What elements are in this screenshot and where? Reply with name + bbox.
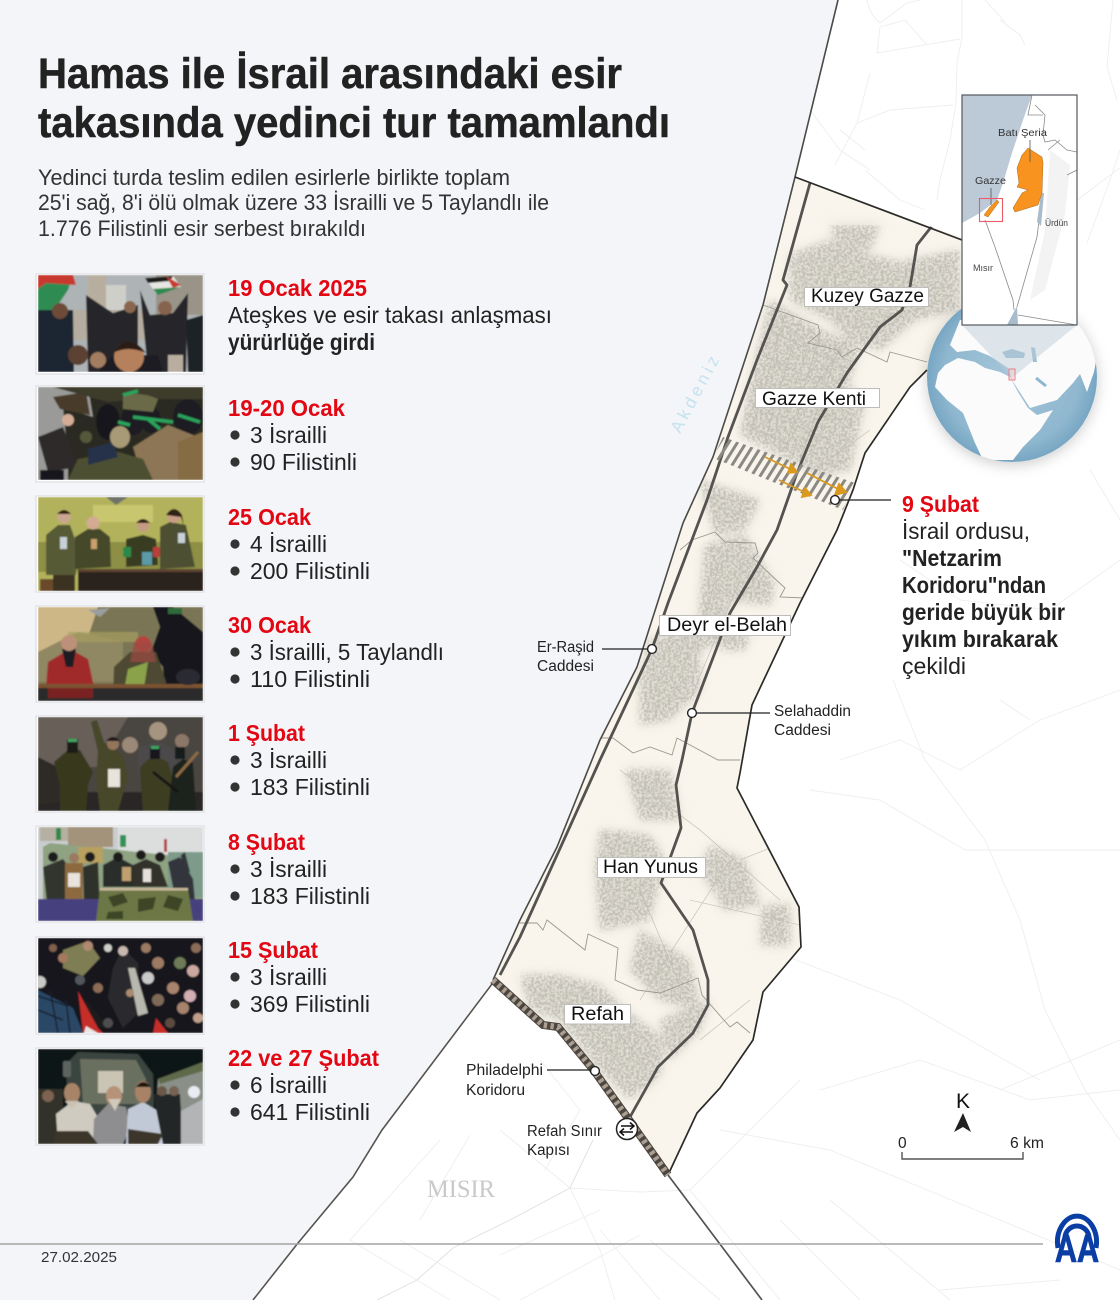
timeline: 22 ve 27 Şubat: 6 İsrailli bbox=[250, 1072, 327, 1098]
country label: Mısır: MISIR bbox=[427, 1176, 495, 1203]
timeline: 22 ve 27 Şubat: 22 ve 27 Şubat bbox=[228, 1045, 379, 1071]
label: Gazze Kenti: Gazze Kenti bbox=[762, 389, 866, 410]
timeline: 15 Şubat bbox=[228, 937, 370, 1017]
sea label: Akdeniz: Akdeniz bbox=[667, 353, 723, 436]
arrows: Israeli withdrawal from Netzarim bbox=[765, 457, 846, 497]
scale bar bbox=[898, 1135, 1044, 1159]
inset: Gaza bbox=[984, 200, 999, 217]
timeline: 19-20 Ocak bbox=[228, 395, 357, 475]
title bbox=[38, 50, 670, 147]
subtitle: 1.776 Filistinli esir serbest bırakıldı bbox=[38, 216, 366, 241]
timeline: 22 ve 27 Şubat: 641 Filistinli bbox=[250, 1099, 370, 1125]
callout: Netzarim 9 Şubat: İsrail ordusu, bbox=[902, 518, 1030, 544]
inset: West Bank bbox=[1013, 148, 1043, 212]
callout: Refah Sınır Kapısı bbox=[527, 1118, 638, 1159]
photo: Red Cross handover table bbox=[38, 607, 203, 701]
inset label: Mısır: Mısır bbox=[973, 263, 993, 273]
timeline: 8 Şubat bbox=[228, 829, 370, 909]
scale bar: 6 km bbox=[1010, 1135, 1044, 1152]
timeline: 30 Ocak: 3 İsrailli, 5 Taylandlı bbox=[250, 639, 444, 665]
callout: Er-Raşid Caddesi bbox=[537, 639, 656, 675]
Netzarim corridor hatch band bbox=[716, 437, 854, 510]
surrounding faint road network bbox=[350, 0, 1120, 1300]
callout: Philadelphi Koridoru bbox=[466, 1062, 599, 1099]
timeline: 25 Ocak: 200 Filistinli bbox=[250, 558, 370, 584]
photo frames bbox=[36, 274, 204, 1145]
roads: Er-Rashid and Salah al-Din bbox=[500, 183, 932, 1117]
inset locator map bbox=[962, 95, 1077, 325]
photo: ceasefire celebration with flags bbox=[38, 275, 203, 372]
callout: Er-Raşid Caddesi: Er-Raşid bbox=[537, 639, 594, 656]
timeline: 19-20 Ocak: 90 Filistinli bbox=[250, 449, 357, 475]
inset label: Batı Şeria: Batı Şeria bbox=[998, 127, 1047, 139]
inset label: Ürdün: Ürdün bbox=[1045, 218, 1068, 229]
timeline: 22 ve 27 Şubat bbox=[228, 1045, 379, 1125]
timeline: 15 Şubat: 369 Filistinli bbox=[250, 991, 370, 1017]
streets: Gaza City grid bbox=[560, 315, 870, 1060]
inset: leader lines bbox=[991, 140, 1030, 205]
inset: borders bbox=[985, 95, 1077, 325]
timeline: 19 Ocak 2025: Ateşkes ve esir takası anlaşması bbox=[228, 302, 552, 328]
timeline: 30 Ocak: 30 Ocak bbox=[228, 612, 311, 638]
map: Gaza Strip territory bbox=[253, 0, 1000, 1300]
inset: Mediterranean sea bbox=[962, 95, 1032, 223]
callout: Netzarim 9 Şubat bbox=[831, 491, 1065, 679]
inset label: Gazze: Gazze bbox=[975, 175, 1006, 187]
callout: Netzarim 9 Şubat: "Netzarim bbox=[902, 545, 1002, 571]
label: Kuzey Gazze: Kuzey Gazze bbox=[811, 286, 924, 307]
logo: Anadolu Agency bbox=[1055, 1216, 1099, 1271]
timeline: 8 Şubat: 3 İsrailli bbox=[250, 856, 327, 882]
inset: Dead Sea and Red Sea bbox=[1007, 193, 1044, 325]
callout: Netzarim 9 Şubat: geride büyük bir bbox=[902, 599, 1065, 625]
timeline: 8 Şubat: 183 Filistinli bbox=[250, 883, 370, 909]
subtitle: 25'i sağ, 8'i ölü olmak üzere 33 İsrailli ve 5 Taylandlı ile bbox=[38, 190, 549, 215]
photo: captive handover among fighters bbox=[38, 387, 203, 480]
callout: Refah Sınır Kapısı: Kapısı bbox=[527, 1142, 570, 1159]
subtitle bbox=[38, 165, 549, 241]
timeline: 19-20 Ocak: 3 İsrailli bbox=[250, 422, 327, 448]
timeline: 30 Ocak bbox=[228, 612, 444, 692]
scale bar: 0 bbox=[898, 1135, 907, 1152]
locator globe bbox=[927, 292, 1100, 462]
inset: Gaza selection box bbox=[980, 198, 1002, 222]
callout: Selahaddin Caddesi: Selahaddin bbox=[774, 703, 851, 720]
timeline: 1 Şubat: 3 İsrailli bbox=[250, 747, 327, 773]
label: Han Yunus: Han Yunus bbox=[603, 857, 698, 878]
photo: captive with fighters in front of posters bbox=[38, 717, 203, 811]
timeline: 1 Şubat: 183 Filistinli bbox=[250, 774, 370, 800]
panel: sea and left column background bbox=[0, 0, 838, 1300]
timeline: 25 Ocak: 4 İsrailli bbox=[250, 531, 327, 557]
timeline: 1 Şubat: 1 Şubat bbox=[228, 720, 305, 746]
label: Deyr el-Belah: Deyr el-Belah bbox=[667, 615, 787, 636]
north arrow bbox=[954, 1090, 971, 1132]
photo: crowd with Palestinian flag bbox=[38, 938, 203, 1033]
subtitle: Yedinci turda teslim edilen esirlerle birlikte toplam bbox=[38, 165, 510, 190]
timeline: 25 Ocak: 25 Ocak bbox=[228, 504, 311, 530]
label: Refah: Refah bbox=[571, 1004, 624, 1025]
timeline: 8 Şubat: 8 Şubat bbox=[228, 829, 305, 855]
callout: Refah Sınır Kapısı: Refah Sınır bbox=[527, 1123, 602, 1140]
callout: Netzarim 9 Şubat: çekildi bbox=[902, 653, 966, 679]
photo: four captives on stage bbox=[38, 497, 203, 591]
timeline: 19-20 Ocak: 19-20 Ocak bbox=[228, 395, 345, 421]
timeline: 15 Şubat: 3 İsrailli bbox=[250, 964, 327, 990]
timeline: 19 Ocak 2025: 19 Ocak 2025 bbox=[228, 275, 367, 301]
callout: Netzarim 9 Şubat: yıkım bırakarak bbox=[902, 626, 1058, 652]
logo: Anadolu Agency: AA bbox=[1055, 1228, 1099, 1271]
photo: released prisoners with bus at night bbox=[38, 1049, 203, 1144]
footer rule and date: 27.02.2025 bbox=[41, 1250, 117, 1266]
timeline: 19 Ocak 2025: yürürlüğe girdi bbox=[228, 329, 375, 355]
callout: Philadelphi Koridoru: Philadelphi bbox=[466, 1062, 543, 1079]
governorate boundaries bbox=[520, 305, 927, 1033]
callout: Selahaddin Caddesi: Caddesi bbox=[774, 722, 831, 739]
title: takasında yedinci tur tamamlandı bbox=[38, 99, 670, 147]
timeline: 25 Ocak bbox=[228, 504, 370, 584]
callout: Philadelphi Koridoru: Koridoru bbox=[466, 1082, 525, 1099]
timeline: 19 Ocak 2025 bbox=[228, 275, 552, 355]
north arrow: K bbox=[956, 1090, 970, 1113]
timeline: 30 Ocak: 110 Filistinli bbox=[250, 666, 370, 692]
callout: Er-Raşid Caddesi: Caddesi bbox=[537, 658, 594, 675]
inset: Jordan terrain bbox=[1030, 150, 1070, 300]
callout: Netzarim 9 Şubat: Koridoru"ndan bbox=[902, 572, 1046, 598]
timeline: 1 Şubat bbox=[228, 720, 370, 800]
Philadelphi corridor bbox=[493, 980, 668, 1175]
photo: stage with bus banner and camouflage table bbox=[38, 827, 203, 921]
callout: Netzarim 9 Şubat: 9 Şubat bbox=[902, 491, 979, 517]
callout: Selahaddin Caddesi bbox=[688, 703, 851, 739]
title: Hamas ile İsrail arasındaki esir bbox=[38, 50, 622, 98]
timeline: 15 Şubat: 15 Şubat bbox=[228, 937, 318, 963]
